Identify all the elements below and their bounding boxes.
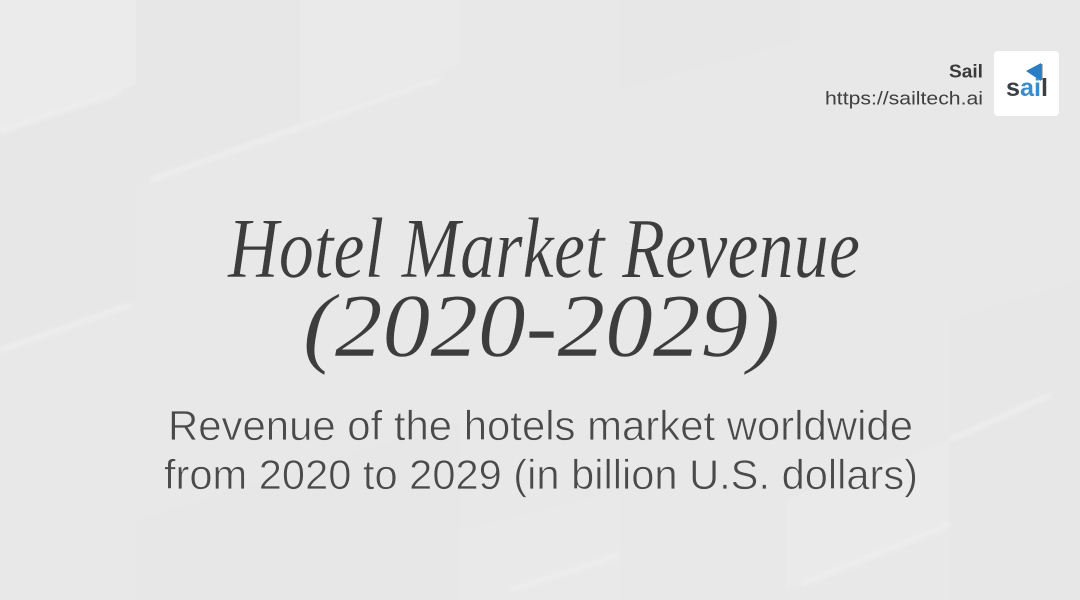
icon: sail logo — [994, 51, 1059, 116]
title line 2: (2020-2029) — [303, 277, 780, 376]
subtitle line 1: Revenue of the hotels market worldwide — [168, 402, 913, 449]
title — [227, 200, 860, 376]
brand url: https://sailtech.ai — [825, 88, 983, 108]
subtitle — [164, 402, 918, 498]
title line 1: Hotel Market Revenue — [227, 200, 860, 296]
brand name: Sail — [949, 60, 983, 82]
icon: sail logo: sail — [1006, 74, 1048, 102]
subtitle line 2: from 2020 to 2029 (in billion U.S. dollars) — [164, 451, 918, 498]
